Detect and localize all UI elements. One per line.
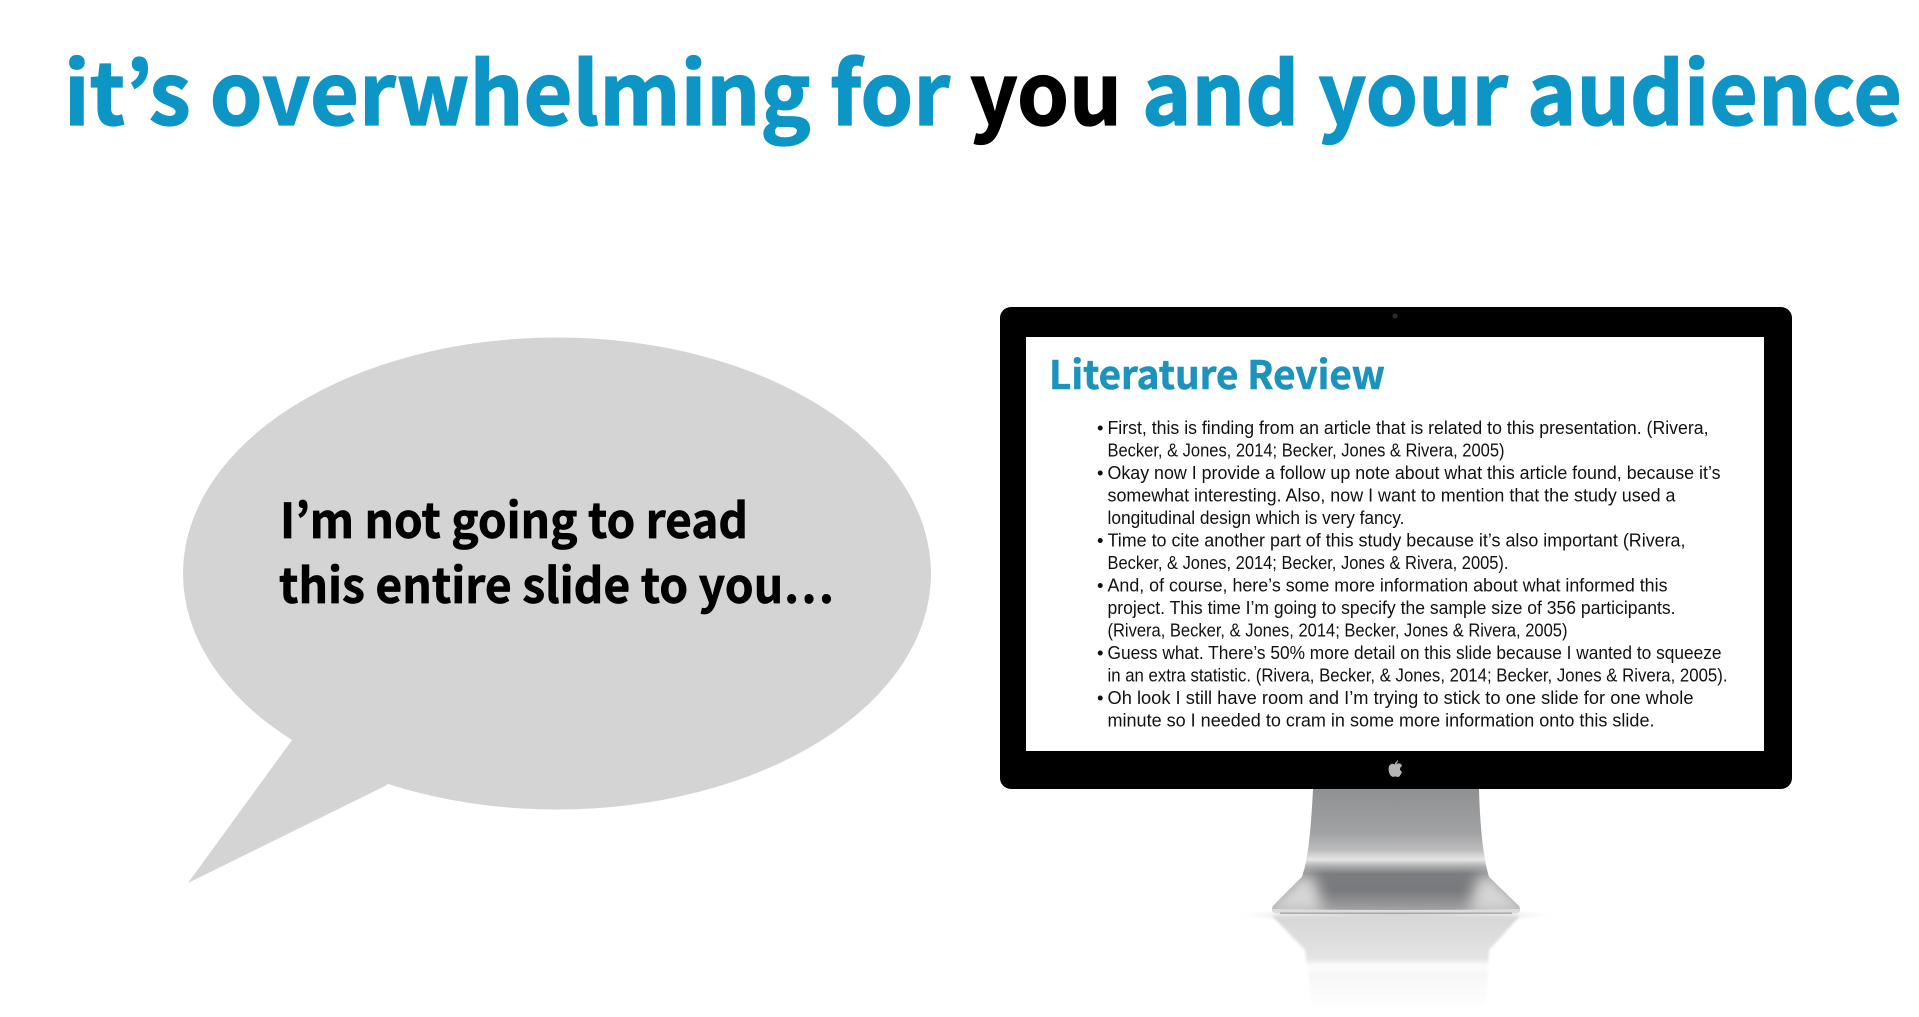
slide bullet list: • (1097, 417, 1103, 438)
slide bullet list: Becker, & Jones, 2014; Becker, Jones & Rivera, 2005). (1108, 552, 1508, 573)
slide bullet list: • (1097, 574, 1103, 596)
monitor stand (1264, 789, 1528, 964)
monitor bezel (1000, 307, 1792, 789)
slide bullet list: • (1097, 462, 1103, 483)
camera (1392, 314, 1398, 318)
slide bullet list: Becker, & Jones, 2014; Becker, Jones & Rivera, 2005) (1108, 440, 1504, 460)
title: you (970, 25, 1122, 150)
slide bullet list: somewhat interesting. Also, now I want to mention that the study used a (1108, 484, 1676, 506)
stand reflection (1272, 916, 1520, 1008)
slide bullet list: project. This time I’m going to specify the sample size of 356 participants. (1108, 597, 1676, 618)
slide bullet list (1097, 417, 1728, 730)
slide bullet list: (Rivera, Becker, & Jones, 2014; Becker, Jones & Rivera, 2005) (1108, 620, 1568, 640)
slide bullet list: Okay now I provide a follow up note about what this article found, because it’s (1108, 462, 1720, 483)
slide bullet list: And, of course, here’s some more information about what informed this (1108, 574, 1668, 596)
slide bullet list: • (1097, 687, 1103, 708)
slide bullet list: • (1097, 530, 1103, 550)
title (64, 25, 1902, 150)
slide bullet list: longitudinal design which is very fancy. (1108, 507, 1404, 528)
slide bullet list: in an extra statistic. (Rivera, Becker, & Jones, 2014; Becker, Jones & Rivera, 2005). (1108, 664, 1728, 686)
slide bullet list: Time to cite another part of this study because it’s also important (Rivera, (1108, 530, 1686, 550)
title: it’s overwhelming for (64, 25, 950, 150)
speech bubble text: I’m not going to read (280, 482, 748, 552)
slide screen (1026, 337, 1764, 751)
slide bullet list: Guess what. There’s 50% more detail on this slide because I wanted to squeeze (1108, 642, 1722, 663)
slide bullet list: First, this is finding from an article that is related to this presentation. (Rivera, (1108, 417, 1708, 438)
title: and your audience (1142, 25, 1902, 150)
speech bubble text (279, 482, 834, 617)
apple logo (1388, 760, 1402, 777)
slide bullet list: minute so I needed to cram in some more information onto this slide. (1108, 710, 1654, 730)
slide title: Literature Review (1049, 345, 1385, 401)
stand shadow (1231, 907, 1561, 923)
speech bubble text: this entire slide to you… (279, 547, 834, 617)
slide bullet list: • (1097, 642, 1103, 663)
stand body (1272, 789, 1520, 913)
speech bubble (183, 338, 931, 883)
slide bullet list: Oh look I still have room and I’m trying to stick to one slide for one whole (1108, 687, 1694, 708)
monitor (1000, 307, 1792, 1008)
